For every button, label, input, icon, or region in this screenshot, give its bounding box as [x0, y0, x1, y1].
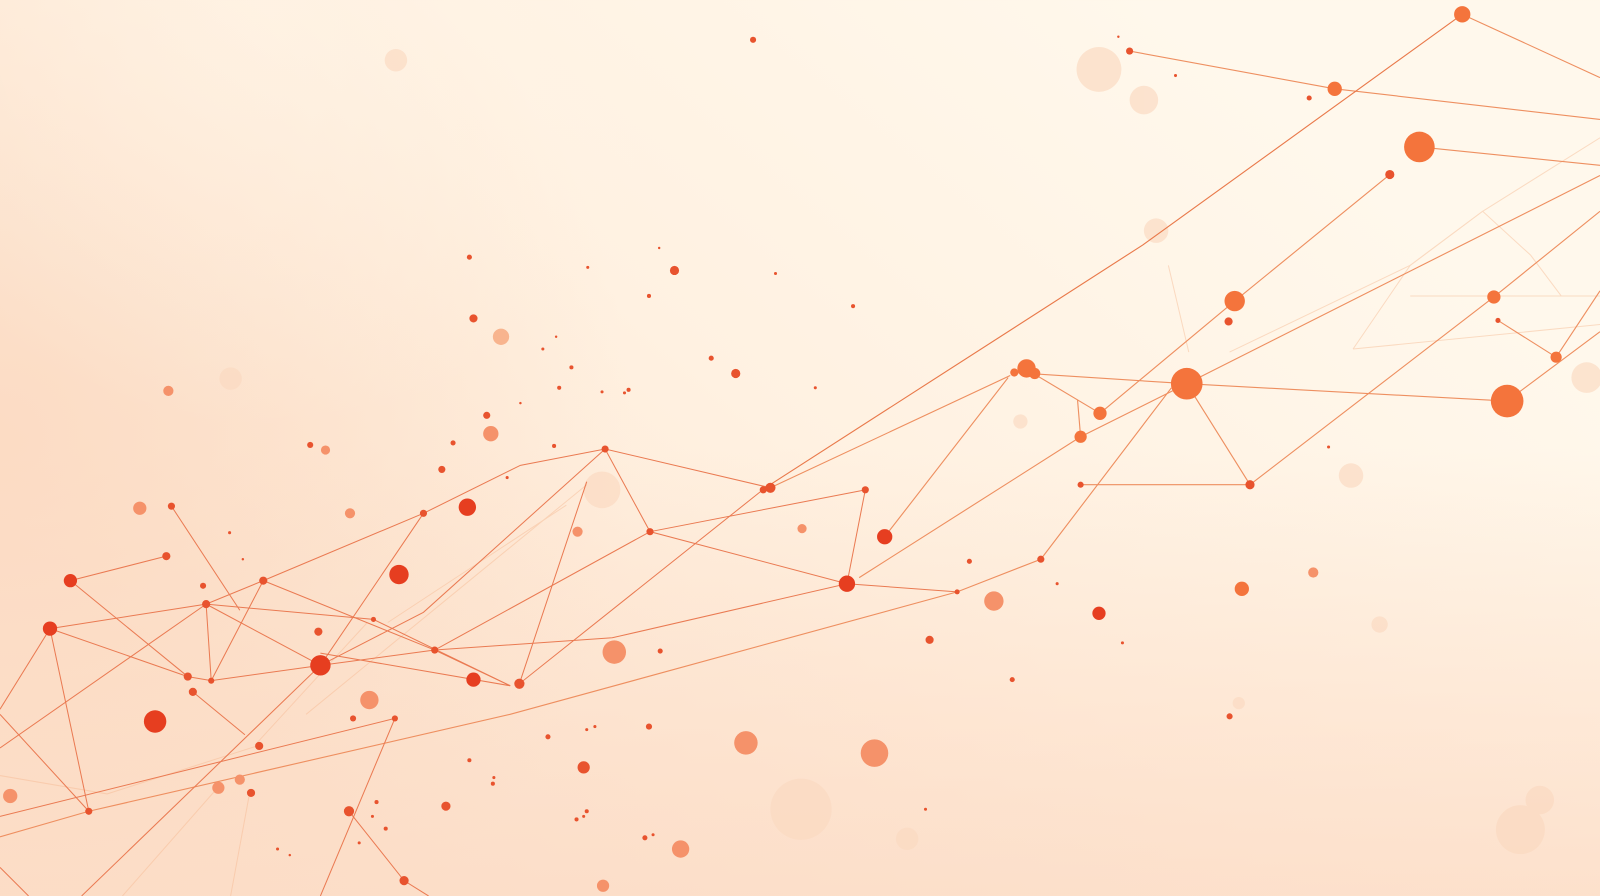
soft peach nodes [3, 329, 1318, 892]
faint background bubbles [219, 47, 1600, 854]
orange nodes [1010, 6, 1562, 596]
large nodes [43, 499, 1106, 733]
